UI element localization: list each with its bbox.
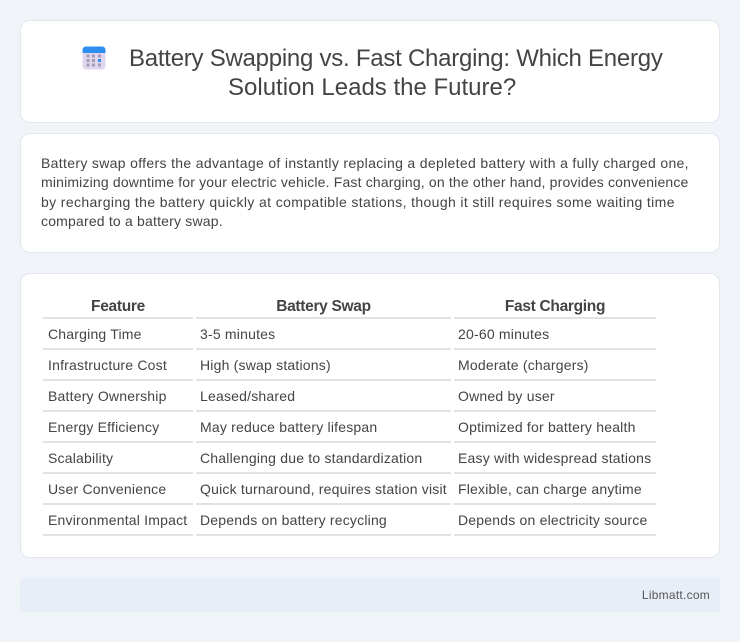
header: Battery Swap: Battery Swap	[276, 298, 371, 315]
header: Fast Charging: Fast Charging	[505, 298, 605, 315]
row: Energy Efficiency: Energy Efficiency	[48, 419, 159, 435]
row: Infrastructure Cost	[48, 357, 589, 373]
row: User Convenience: Flexible, can charge anytime	[458, 481, 642, 497]
panel: intro card	[20, 133, 720, 253]
row: Battery Ownership: Owned by user	[458, 388, 555, 404]
row: Scalability	[48, 450, 651, 466]
header: Feature: Feature	[91, 298, 145, 315]
intro text: by recharging the battery quickly at compatible stations, though it still requires some waiting time	[41, 194, 675, 210]
row: User Convenience: User Convenience	[48, 481, 166, 497]
row: Environmental Impact: Environmental Impact	[48, 512, 187, 528]
title line 1: Battery Swapping vs. Fast Charging: Which Energy	[129, 45, 663, 72]
row: Infrastructure Cost: Moderate (chargers)	[458, 357, 589, 373]
row: Scalability: Scalability	[48, 450, 113, 466]
intro text: Battery swap offers the advantage of instantly replacing a depleted battery with a fully charged one,	[41, 155, 689, 171]
row: User Convenience: Quick turnaround, requires station visit	[200, 481, 447, 497]
row: Charging Time: 20-60 minutes	[458, 326, 549, 342]
row: Energy Efficiency: Optimized for battery health	[458, 419, 636, 435]
row: Environmental Impact: Depends on battery recycling	[200, 512, 387, 528]
intro text: compared to a battery swap.	[41, 213, 223, 229]
row: Energy Efficiency	[48, 419, 636, 435]
row: Battery Ownership: Battery Ownership	[48, 388, 167, 404]
footer text: Libmatt.com	[642, 588, 710, 602]
row: Environmental Impact: Depends on electricity source	[458, 512, 647, 528]
intro text	[41, 155, 689, 229]
row: Charging Time	[48, 326, 549, 342]
row: Scalability: Easy with widespread stations	[458, 450, 651, 466]
row: User Convenience	[48, 481, 642, 497]
row: Charging Time: 3-5 minutes	[200, 326, 275, 342]
row: Battery Ownership	[48, 388, 555, 404]
panel: table card	[20, 273, 720, 558]
title line 2: Solution Leads the Future?	[228, 74, 516, 101]
icon: calendar	[82, 46, 106, 70]
row: Infrastructure Cost: Infrastructure Cost	[48, 357, 167, 373]
intro text: minimizing downtime for your electric vehicle. Fast charging, on the other hand, provides convenience	[41, 174, 688, 190]
panel: title card	[20, 20, 720, 123]
footer bar	[20, 578, 720, 612]
row: Scalability: Challenging due to standardization	[200, 450, 422, 466]
row: Charging Time: Charging Time	[48, 326, 142, 342]
row: Energy Efficiency: May reduce battery lifespan	[200, 419, 377, 435]
row: Infrastructure Cost: High (swap stations)	[200, 357, 331, 373]
row: Battery Ownership: Leased/shared	[200, 388, 295, 404]
row: Environmental Impact	[48, 512, 647, 528]
